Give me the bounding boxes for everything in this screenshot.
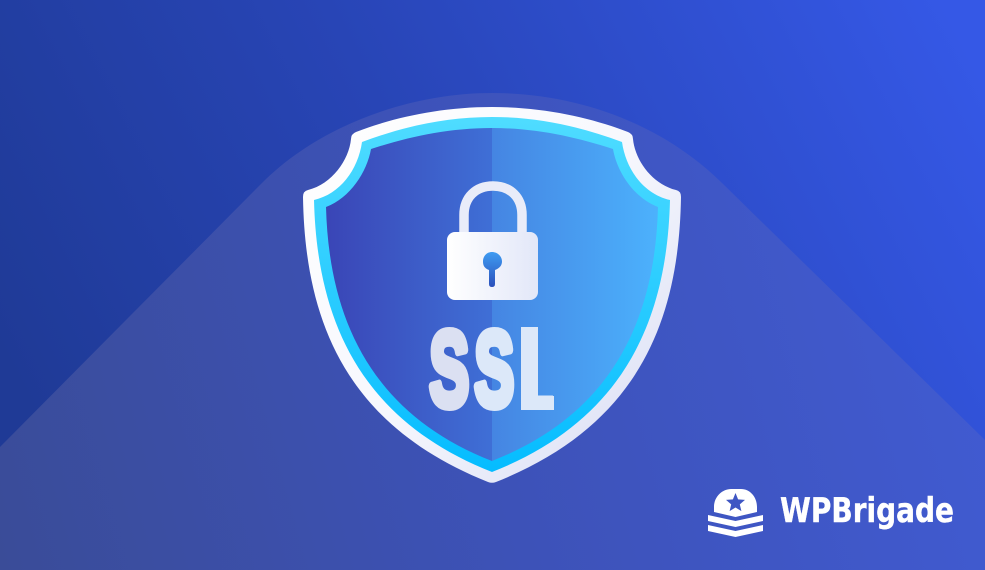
padlock body (447, 232, 538, 300)
padlock keyhole (483, 252, 502, 287)
WPBrigade logo (708, 489, 954, 537)
SSL label: S (474, 310, 514, 429)
shield outer white border (303, 107, 681, 483)
logo icon: brigade badge (708, 489, 763, 537)
SSL label (430, 308, 554, 433)
dome with star (714, 489, 757, 517)
shield left face (326, 128, 492, 461)
SSL label: S (430, 310, 469, 429)
shield cyan border (314, 117, 670, 472)
padlock icon (447, 186, 538, 300)
padlock shackle (464, 186, 522, 236)
shield right face (492, 128, 658, 461)
chevron stripes (708, 515, 763, 537)
SSL label: L (518, 308, 554, 433)
shield badge (303, 107, 681, 483)
